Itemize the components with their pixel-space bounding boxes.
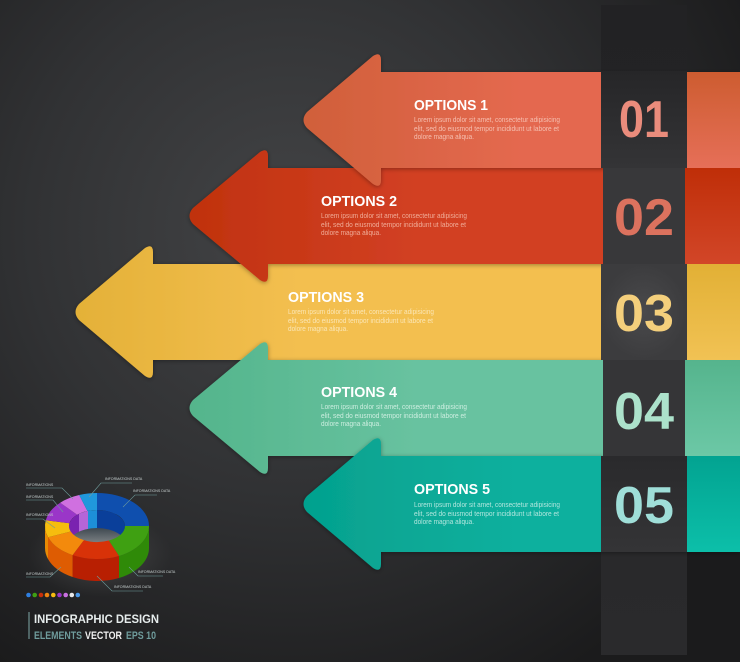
text block: options 4: OPTIONS 4: [321, 384, 398, 401]
text block: options 3: [288, 289, 434, 333]
donut labels: INFORMATIONS DATA: [133, 489, 171, 493]
donut labels: INFORMATIONS: [26, 513, 54, 517]
donut labels: INFORMATIONS: [26, 495, 54, 499]
text block: options 2: Lorem ipsum dolor sit amet, consectetur adipisicing: [321, 211, 467, 220]
donut labels: [26, 477, 176, 589]
3D donut chart: [26, 477, 176, 597]
text block: options 1: dolore magna aliqua.: [414, 132, 474, 141]
donut inner wall and floor: [69, 510, 125, 542]
text block: options 2: elit, sed do eiusmod tempor incididunt ut labore et: [321, 220, 466, 229]
text block: options 5: Lorem ipsum dolor sit amet, consectetur adipisicing: [414, 500, 560, 509]
title block: EPS 10: [126, 630, 156, 642]
text block: options 4: elit, sed do eiusmod tempor incididunt ut labore et: [321, 411, 466, 420]
text block: options 1: Lorem ipsum dolor sit amet, consectetur adipisicing: [414, 115, 560, 124]
number cell 03: [601, 264, 687, 360]
text block: options 4: dolore magna aliqua.: [321, 419, 381, 428]
text block: options 5: [414, 481, 560, 526]
colour dots legend: [26, 593, 80, 597]
number cell 05: [601, 456, 687, 552]
donut labels: INFORMATIONS DATA: [114, 585, 152, 589]
text block: options 3: OPTIONS 3: [288, 289, 364, 306]
number cell 02: 02: [614, 189, 674, 247]
number cell 05: 05: [614, 477, 674, 535]
title block: ELEMENTS: [34, 630, 82, 642]
right band segments: [685, 72, 740, 552]
text block: options 3: dolore magna aliqua.: [288, 324, 348, 333]
donut labels: INFORMATIONS: [26, 572, 54, 576]
number cell 01: 01: [619, 91, 669, 149]
number cell 01: [601, 71, 687, 168]
donut labels: INFORMATIONS DATA: [105, 477, 143, 481]
donut leader lines: [26, 483, 163, 591]
vertical strip: [601, 5, 687, 655]
arrow 4: green: [190, 342, 740, 474]
arrow 2: red: [190, 150, 740, 282]
number cell 02: [603, 168, 685, 264]
donut side walls: [45, 526, 149, 581]
title block: VECTOR: [85, 630, 122, 642]
text block: options 1: OPTIONS 1: [414, 97, 488, 114]
text block: options 5: dolore magna aliqua.: [414, 517, 474, 526]
text block: options 2: dolore magna aliqua.: [321, 228, 381, 237]
title block: INFOGRAPHIC DESIGN: [34, 612, 159, 626]
text block: options 5: OPTIONS 5: [414, 481, 490, 498]
text block: options 2: [321, 193, 467, 237]
text block: options 4: Lorem ipsum dolor sit amet, consectetur adipisicing: [321, 402, 467, 411]
text block: options 4: [321, 384, 467, 428]
arrow 3: yellow: [76, 246, 740, 378]
text block: options 3: Lorem ipsum dolor sit amet, consectetur adipisicing: [288, 307, 434, 316]
text block: options 1: [414, 97, 560, 141]
text block: options 1: elit, sed do eiusmod tempor incididunt ut labore et: [414, 124, 559, 133]
arrow 1: coral: [304, 54, 740, 186]
donut labels: INFORMATIONS: [26, 483, 54, 487]
title block: [28, 612, 159, 642]
arrow 5: teal: [304, 438, 740, 570]
text block: options 3: elit, sed do eiusmod tempor incididunt ut labore et: [288, 316, 433, 325]
text block: options 2: OPTIONS 2: [321, 193, 397, 210]
number cell 03: 03: [614, 285, 674, 343]
number cell 04: 04: [614, 383, 674, 441]
donut top segments: [45, 493, 149, 559]
donut labels: INFORMATIONS DATA: [138, 570, 176, 574]
text block: options 5: elit, sed do eiusmod tempor incididunt ut labore et: [414, 509, 559, 518]
number cell 04: [603, 360, 685, 456]
